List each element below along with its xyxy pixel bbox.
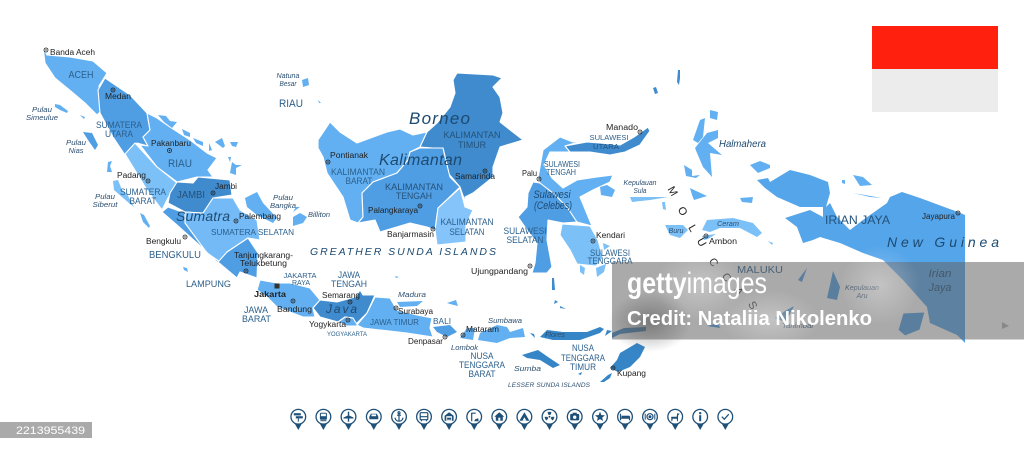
labels: Borneo: TIMUR bbox=[458, 140, 486, 150]
image id badge bbox=[0, 422, 92, 438]
region: Jawa Tengah bbox=[313, 290, 375, 325]
labels: Sulawesi and Maluku: (Celebes) bbox=[534, 200, 572, 212]
map: Sulawesi bbox=[518, 127, 650, 273]
province: Bengkulu: BENGKULU bbox=[149, 250, 201, 261]
city: Medan: Medan bbox=[105, 92, 131, 101]
icon: camera bbox=[567, 409, 583, 430]
province: Riau: RIAU bbox=[168, 158, 192, 170]
labels: Java and Lesser Sunda: TENGGARA bbox=[561, 353, 605, 363]
icon: crane bbox=[466, 409, 482, 430]
island label: Pulau Siberut: Pulau bbox=[95, 192, 116, 201]
city: Surabaya: Surabaya bbox=[398, 307, 434, 316]
island label: Halmahera: Halmahera bbox=[719, 138, 766, 150]
province: Sumatera Barat: SUMATERA bbox=[120, 187, 166, 197]
labels: Borneo: BARAT bbox=[346, 176, 373, 186]
city: Pontianak: Pontianak bbox=[330, 151, 369, 160]
island name: New Guinea: New Guinea bbox=[887, 234, 999, 250]
island name: Sulawesi (Celebes): Sulawesi bbox=[534, 189, 571, 201]
map: Maluku islands bbox=[630, 110, 882, 245]
province: Yogyakarta: YOGYAKARTA bbox=[327, 332, 367, 338]
labels: Java and Lesser Sunda: TIMUR bbox=[570, 362, 596, 372]
island name: Java: Java bbox=[325, 302, 357, 316]
labels: Borneo bbox=[308, 109, 500, 258]
region: Kalimantan Selatan bbox=[435, 188, 473, 245]
city: Palangkaraya: Palangkaraya bbox=[368, 206, 419, 215]
group name: Moluccas: C bbox=[719, 271, 733, 284]
image id badge: 2213955439 bbox=[16, 425, 85, 437]
city: Kupang: Kupang bbox=[617, 369, 646, 378]
city: Ujungpandang: Ujungpandang bbox=[471, 267, 528, 276]
province: Nusa Tenggara Barat: NUSA bbox=[470, 351, 494, 361]
province: Aceh: ACEH bbox=[68, 70, 94, 81]
province: Sumatera Utara: SUMATERA bbox=[96, 120, 142, 130]
icon: plate bbox=[642, 409, 658, 430]
labels: Sulawesi and Maluku: TENGGARA bbox=[588, 256, 632, 266]
labels: Sulawesi and Maluku bbox=[471, 123, 783, 312]
labels: Java and Lesser Sunda: BARAT bbox=[468, 369, 496, 379]
labels: New Guinea: Jaya bbox=[928, 282, 952, 294]
icon: information bbox=[692, 409, 708, 430]
island: Morotai bbox=[710, 110, 718, 120]
city: Bengkulu: Bengkulu bbox=[146, 237, 181, 246]
group name: Moluccas: A bbox=[731, 285, 745, 298]
island: Sumba bbox=[522, 350, 560, 368]
labels: Sumatra: Nias bbox=[68, 146, 84, 155]
city: Ambon: Ambon bbox=[709, 237, 737, 246]
island: Halmahera bbox=[693, 118, 705, 143]
city: Bandung: Bandung bbox=[277, 305, 312, 314]
province: Sumatera Selatan: SUMATERA SELATAN bbox=[211, 227, 294, 237]
province: Riau islands: RIAU bbox=[279, 98, 303, 110]
icon: deer bbox=[667, 409, 683, 430]
island label: Pulau Nias: Pulau bbox=[66, 138, 87, 147]
labels: Sumatra: Simeulue bbox=[26, 113, 58, 122]
city: Denpasar: Denpasar bbox=[408, 337, 443, 346]
region: Sulawesi Tengah bbox=[538, 137, 613, 226]
icon: car bbox=[366, 409, 382, 430]
labels: Java and Lesser Sunda: BARAT bbox=[242, 314, 271, 324]
icon row bbox=[290, 409, 733, 430]
icon: anchor bbox=[391, 409, 407, 430]
province: Jakarta Raya: JAKARTA bbox=[284, 271, 316, 280]
icon: star bbox=[592, 409, 608, 430]
city markers bbox=[44, 48, 960, 370]
labels: Sulawesi and Maluku: UTARA bbox=[593, 142, 619, 151]
labels: New Guinea bbox=[782, 212, 999, 330]
watermark band bbox=[608, 245, 1024, 352]
group name: Moluccas bbox=[665, 185, 759, 312]
icon: signpost bbox=[290, 409, 306, 430]
island name: Sumatra: Sumatra bbox=[176, 208, 230, 224]
labels: Sulawesi and Maluku: Sula bbox=[634, 188, 647, 195]
province: Jawa Timur: JAWA TIMUR bbox=[370, 318, 419, 327]
city: Banjarmasin: Banjarmasin bbox=[387, 230, 434, 239]
group name: Moluccas: C bbox=[706, 256, 720, 269]
region: Sumatera Utara bbox=[98, 78, 150, 155]
island label: Pulau Bangka: Pulau bbox=[273, 193, 294, 202]
region: Jawa Timur bbox=[357, 297, 433, 337]
region name: Irian Jaya italic: Irian bbox=[928, 268, 952, 280]
island label: Madura: Madura bbox=[398, 290, 426, 299]
icon: tent bbox=[516, 409, 532, 430]
province: Irian Jaya: IRIAN JAYA bbox=[825, 215, 890, 227]
map: Sumatra offshore islands bbox=[55, 78, 321, 272]
province: Lampung: LAMPUNG bbox=[186, 279, 231, 289]
province: Sulawesi Utara: SULAWESI bbox=[590, 133, 628, 142]
icon: radiation bbox=[542, 409, 558, 430]
region: Riau bbox=[140, 113, 217, 182]
island: Sumbawa bbox=[478, 325, 525, 343]
region: Sulawesi Utara bbox=[565, 127, 650, 155]
icon: checkmark bbox=[717, 409, 733, 430]
map: Java bbox=[257, 280, 433, 337]
labels: New Guinea: Aru bbox=[856, 291, 868, 300]
island label: Tanimbar: Tanimbar bbox=[782, 321, 815, 330]
island: Flores bbox=[540, 327, 604, 340]
city: Jakarta: Jakarta bbox=[254, 290, 287, 299]
labels: Borneo: SELATAN bbox=[450, 227, 484, 237]
province: Jawa Barat: JAWA bbox=[244, 305, 268, 315]
province: Bali: BALI bbox=[433, 317, 451, 326]
province: Jambi: JAMBI bbox=[177, 190, 205, 201]
labels: Sulawesi and Maluku: SELATAN bbox=[506, 235, 544, 245]
labels: Sumatra: Bangka bbox=[270, 201, 296, 210]
icon: bus bbox=[416, 409, 432, 430]
labels: Sumatra: BARAT bbox=[130, 196, 157, 206]
island label: Buru: Buru bbox=[668, 226, 684, 235]
region: Sulawesi Tenggara bbox=[560, 224, 603, 266]
city: Kendari: Kendari bbox=[596, 231, 625, 240]
city: Tanjungkarang-Telukbetung: Tanjungkarang- bbox=[234, 251, 293, 260]
icon: garage bbox=[441, 409, 457, 430]
region: Sumatera Selatan bbox=[185, 198, 260, 262]
group name: Moluccas: U bbox=[694, 236, 708, 249]
island label: Ceram: Ceram bbox=[717, 219, 739, 228]
city: Banda Aceh: Banda Aceh bbox=[50, 48, 95, 57]
region: Bengkulu bbox=[162, 207, 220, 262]
labels: Sumatra: Besar bbox=[280, 81, 297, 88]
city: Yogykarta: Yogykarta bbox=[309, 320, 347, 329]
province: Kalimantan Tengah: KALIMANTAN bbox=[385, 182, 443, 192]
watermark logo: gettyimages: gettyimages bbox=[627, 267, 767, 300]
island: Frederik Hendrik bbox=[898, 312, 925, 336]
labels: Borneo: TENGAH bbox=[396, 191, 432, 201]
city: Manado: Manado bbox=[606, 123, 639, 132]
province: Sulawesi Tengah: SULAWESI bbox=[544, 160, 580, 169]
region: Aceh bbox=[43, 47, 107, 115]
map: New Guinea, Irian Jaya bbox=[757, 170, 965, 343]
island label: Flores: Flores bbox=[545, 330, 565, 339]
map: Sumatra bbox=[43, 47, 260, 278]
island: Buru bbox=[665, 225, 688, 238]
region: Lampung bbox=[218, 238, 258, 278]
province: Nusa Tenggara Timur: NUSA bbox=[572, 343, 594, 353]
province: Sulawesi Selatan: SULAWESI bbox=[504, 226, 546, 236]
city: Padang: Padang bbox=[117, 171, 146, 180]
labels: Sumatra: UTARA bbox=[105, 129, 133, 139]
island: Timor bbox=[610, 343, 645, 372]
island label: Natuna Besar: Natuna bbox=[276, 73, 300, 80]
map: Sulawesi islands bbox=[552, 70, 680, 309]
island label: Kepulauan Sula: Kepulauan bbox=[624, 180, 657, 187]
city: Pakanbaru: Pakanbaru bbox=[151, 139, 191, 148]
labels: Sulawesi and Maluku: TENGAH bbox=[546, 168, 576, 177]
province: Sulawesi Tenggara: SULAWESI bbox=[590, 248, 630, 258]
icon: train bbox=[315, 409, 331, 430]
region: Jawa Barat bbox=[257, 280, 320, 317]
city: Mataram: Mataram bbox=[466, 325, 499, 334]
labels: Java and Lesser Sunda: TENGAH bbox=[331, 279, 367, 289]
map: Lesser Sunda islands bbox=[395, 268, 840, 382]
region: Jambi bbox=[168, 177, 232, 213]
region: Kalimantan Tengah bbox=[358, 148, 460, 232]
labels: Java and Lesser Sunda: RAYA bbox=[292, 278, 310, 287]
icon: airplane bbox=[340, 409, 356, 430]
labels: Java and Lesser Sunda: TENGGARA bbox=[459, 360, 505, 370]
city: Jayapura: Jayapura bbox=[922, 212, 956, 221]
island label: Pulau Simeulue: Pulau bbox=[32, 105, 53, 114]
flag of Indonesia bbox=[872, 26, 998, 112]
icon: bed bbox=[617, 409, 633, 430]
island label: Kepulauan Aru: Kepulauan bbox=[845, 283, 879, 292]
province: Maluku: MALUKU bbox=[737, 265, 783, 276]
labels: Sumatra: Telukbetung bbox=[240, 259, 287, 268]
map: Borneo / Kalimantan bbox=[318, 73, 523, 245]
province: Kalimantan Selatan: KALIMANTAN bbox=[440, 217, 494, 227]
group name: Lesser Sunda Islands: LESSER SUNDA ISLANDS bbox=[508, 382, 591, 389]
island: Sula bbox=[630, 197, 668, 202]
province: Jawa Tengah: JAWA bbox=[338, 270, 360, 280]
group name: Moluccas: S bbox=[745, 299, 759, 312]
group name: Moluccas: L bbox=[685, 223, 699, 234]
region: Kalimantan Barat bbox=[318, 122, 427, 223]
island: Ceram bbox=[702, 218, 762, 237]
city: Palembang: Palembang bbox=[239, 212, 281, 221]
region: Sumatera Barat bbox=[125, 143, 177, 210]
island label: Lombok: Lombok bbox=[451, 343, 479, 352]
labels: Sumatra: Siberut bbox=[92, 200, 118, 209]
region name: Kalimantan: Kalimantan bbox=[379, 152, 462, 169]
island group: Aru bbox=[827, 271, 840, 300]
province: Kalimantan Timur: KALIMANTAN bbox=[444, 130, 500, 140]
city: Semarang: Semarang bbox=[322, 291, 360, 300]
region: Kalimantan Timur bbox=[420, 73, 523, 207]
watermark credit: Credit: Nataliia Nikolenko bbox=[627, 308, 872, 330]
city: Jambi: Jambi bbox=[215, 182, 237, 191]
city: Palu: Palu bbox=[522, 169, 537, 178]
icon: house bbox=[491, 409, 507, 430]
region: Sulawesi Selatan bbox=[518, 182, 577, 273]
group name: Moluccas: M bbox=[665, 185, 680, 198]
island label: Billiton: Billiton bbox=[308, 210, 330, 219]
labels: Java and Lesser Sunda bbox=[242, 270, 646, 389]
group name: Moluccas: O bbox=[675, 205, 690, 219]
city: Samarinda: Samarinda bbox=[455, 172, 496, 181]
region: Yogyakarta bbox=[338, 317, 358, 326]
island: Lombok bbox=[460, 328, 475, 340]
province: Kalimantan Barat: KALIMANTAN bbox=[331, 167, 385, 177]
island: Bali bbox=[433, 325, 457, 337]
island label: Sumbawa: Sumbawa bbox=[488, 316, 522, 325]
island group: Tanimbar bbox=[775, 306, 794, 322]
island label: Sumba: Sumba bbox=[514, 364, 541, 373]
group name: Greather Sunda Islands: GREATHER SUNDA ISLANDS bbox=[310, 246, 496, 258]
labels: Sumatra bbox=[26, 48, 303, 289]
island name: Borneo: Borneo bbox=[409, 109, 470, 128]
